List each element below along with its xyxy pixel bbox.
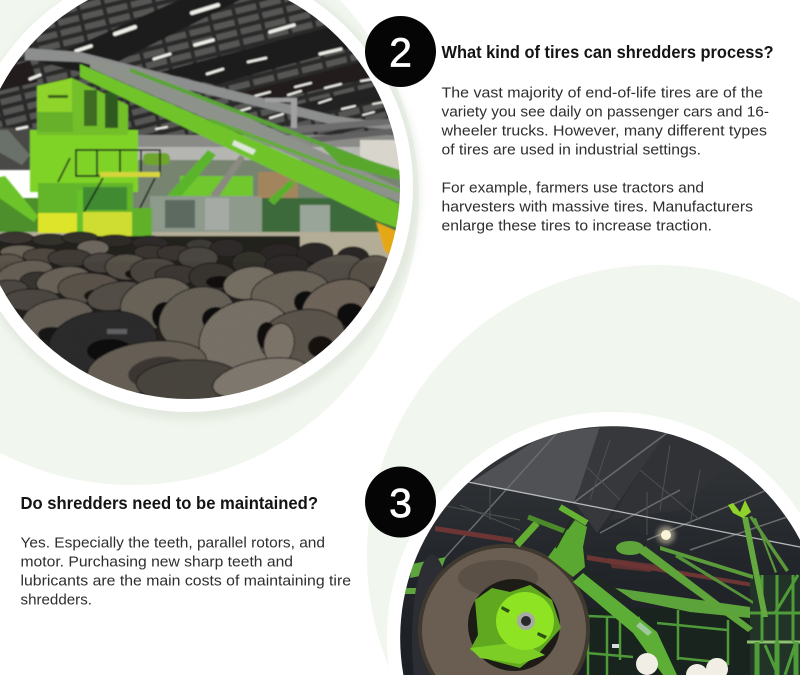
text block: maintenance: Yes. Especially the teeth, parallel rotors, and (20, 534, 325, 552)
main inclined conveyor (80, 60, 400, 229)
text block: maintenance: lubricants are the main costs of maintaining tire (20, 572, 351, 590)
ceiling (0, 0, 430, 170)
right green scaffold (747, 575, 800, 675)
factory roof (395, 420, 800, 675)
text block: tire types: enlarge these tires to increase traction. (442, 218, 712, 234)
text block: tire types (440, 84, 769, 234)
large tire (418, 544, 590, 675)
text block: tire types: variety you see daily on passenger cars and 16- (442, 104, 769, 120)
heading: what kind of tires: What kind of tires can shredders process? (442, 42, 774, 62)
background plant and ducts (0, 48, 405, 240)
workers hard hats (636, 653, 728, 675)
green clamp arm (517, 507, 677, 675)
lower green scaffold (585, 608, 750, 675)
shredder machine (30, 78, 170, 237)
right mast (728, 500, 789, 617)
yellow machine corner (375, 221, 396, 256)
floor behind tires (0, 230, 389, 259)
photo 1 white ring (0, 0, 413, 412)
text block: tire types: For example, farmers use tractors and (442, 180, 704, 196)
number badge 2: 2 (389, 30, 412, 76)
thin boom (616, 541, 753, 632)
text block: maintenance (20, 534, 351, 608)
background circle: lower right (367, 265, 800, 675)
left green beam (410, 557, 446, 578)
text block: tire types: harvesters with massive tires. Manufacturers (442, 198, 753, 216)
photo 1 ring shadow (0, 0, 420, 420)
operator platform railing (58, 150, 160, 212)
number badge 2 (365, 16, 436, 87)
ceiling light (657, 526, 675, 544)
text block: maintenance: shredders. (20, 592, 92, 608)
photo: tire shredding plant with tire pile (0, 0, 430, 407)
text block: tire types: The vast majority of end-of-life tires are of the (442, 84, 763, 102)
number badge 3: 3 (389, 480, 412, 526)
photo 2 white ring (387, 412, 800, 675)
photo: tire on green handling machine (395, 420, 800, 675)
heading: maintenance: Do shredders need to be maintained? (20, 493, 318, 513)
number badge 3 (365, 466, 436, 538)
yellow base panels (38, 213, 78, 233)
green hub with fins (470, 585, 561, 668)
tire pile (0, 232, 410, 407)
dark tire behind (412, 555, 443, 675)
red beams (435, 526, 753, 587)
left feed conveyor (0, 130, 38, 222)
text block: tire types: wheeler trucks. However, many different types (440, 122, 767, 140)
roof panels and trusses (440, 426, 800, 560)
background circle: upper left (0, 0, 419, 485)
platform deck (100, 172, 160, 177)
ceiling lights (17, 5, 384, 129)
green crossbeam (615, 588, 750, 618)
text block: tire types: of tires are used in industrial settings. (442, 142, 701, 158)
text block: maintenance: motor. Purchasing new sharp teeth and (20, 554, 293, 570)
